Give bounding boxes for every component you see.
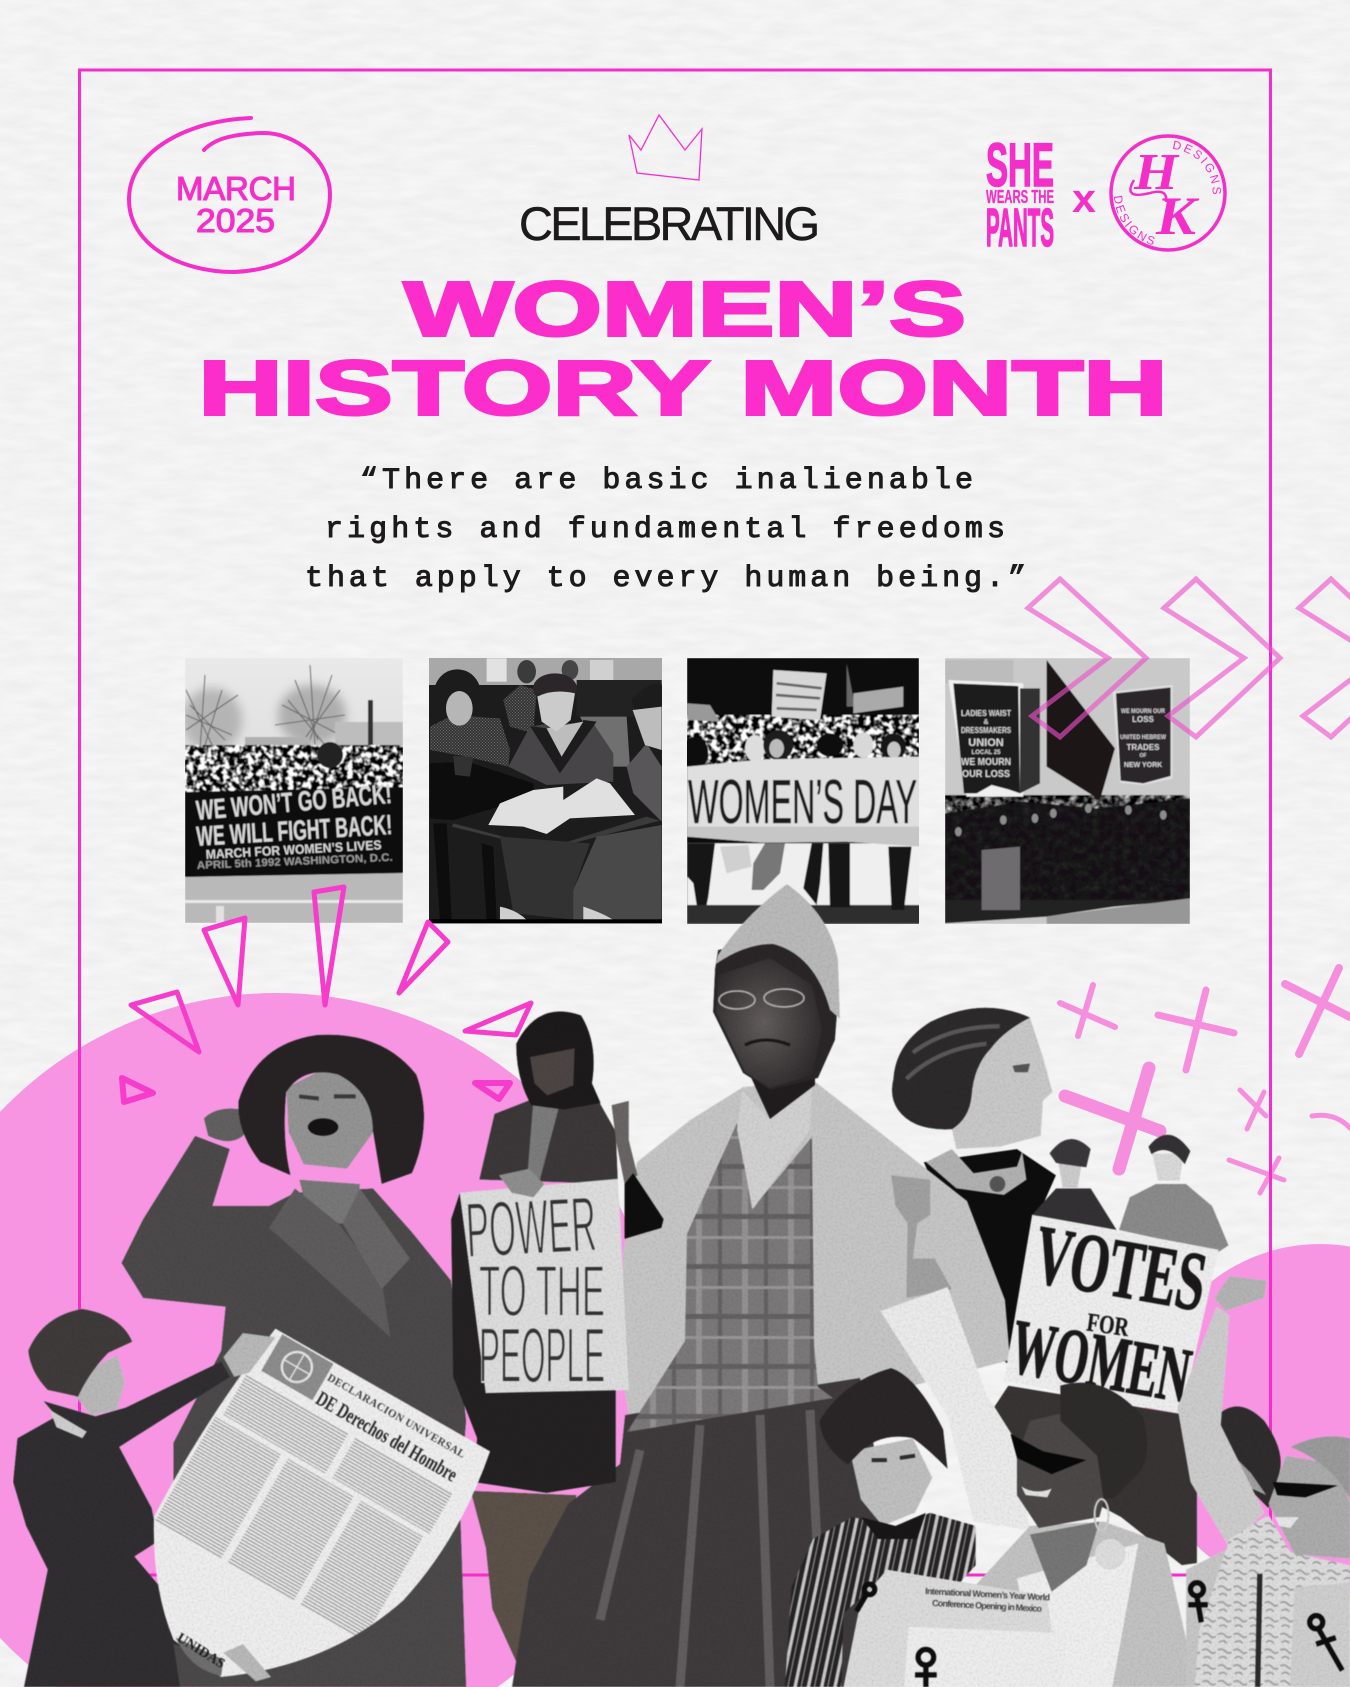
photo: union banners: WE MOURN OUR bbox=[1121, 709, 1166, 715]
date badge: March 2025: MARCH bbox=[176, 170, 296, 207]
photo: union banners: LADIES WAIST bbox=[961, 709, 1011, 718]
figure: activist with sunglasses bbox=[880, 1175, 1196, 1687]
figure: Susan B. Anthony bbox=[892, 1008, 1056, 1372]
photo: union banners: LOCAL 25 bbox=[972, 750, 1001, 756]
figure: Clara Zetkin bbox=[785, 1368, 976, 1687]
title: WOMEN’S bbox=[404, 266, 966, 352]
logo separator: x: x bbox=[1072, 177, 1096, 221]
photo: union banners: UNION bbox=[968, 737, 1004, 749]
photo: march banner: WE WON’T GO BACK! bbox=[195, 778, 393, 826]
photo: march banner: APRIL 5th 1992 WASHINGTON, D.C. bbox=[197, 852, 393, 872]
document: Universal Declaration of Human Rights: DE Derechos del Hombre bbox=[312, 1386, 462, 1486]
photo: union banners: TRADES bbox=[1127, 743, 1160, 752]
page frame bbox=[80, 70, 1270, 1575]
figure: woman with dark hair at back bbox=[1216, 1406, 1281, 1508]
photo: union banners: OF bbox=[1140, 753, 1146, 759]
photo: women at desk bbox=[428, 657, 663, 923]
pink circle: left bbox=[0, 993, 659, 1687]
sign: Votes for Women bbox=[1004, 1208, 1219, 1419]
photo: women's day banner bbox=[682, 658, 921, 924]
figure: woman in hat with raised fist bbox=[121, 1035, 466, 1687]
date badge: March 2025: 2025 bbox=[196, 202, 275, 239]
figure: Marsha's boots bbox=[471, 1491, 577, 1662]
figure: Sojourner Truth bbox=[512, 884, 1010, 1687]
quote: that apply to every human being.” bbox=[305, 562, 1026, 596]
logo: She Wears The Pants: SHE bbox=[986, 131, 1054, 199]
figure: Marsha P. Johnson with sign bbox=[451, 1011, 664, 1493]
logo: HK Designs: K bbox=[1155, 186, 1200, 246]
crosses: scribbled pink marks bbox=[1060, 968, 1350, 1193]
figure: Marsha P. Johnson with sign: PEOPLE bbox=[479, 1311, 605, 1399]
photo: union banners: DRESSMAKERS bbox=[961, 726, 1012, 735]
rays around the left circle bbox=[122, 887, 531, 1102]
chevron arrows bbox=[1028, 579, 1350, 737]
sign: Votes for Women: FOR bbox=[1085, 1307, 1131, 1342]
photo: union banners: UNITED HEBREW bbox=[1120, 735, 1166, 741]
figure: Eleanor Roosevelt bbox=[13, 1309, 232, 1687]
sign: Votes for Women: VOTES bbox=[1027, 1208, 1213, 1330]
logo: HK Designs: H bbox=[1133, 144, 1180, 201]
quote: rights and fundamental freedoms bbox=[325, 513, 1005, 547]
pink circle: right bbox=[1144, 1244, 1350, 1596]
photo: union banners: WE MOURN bbox=[961, 757, 1011, 768]
document: conference papers: Conference Opening in Mexico bbox=[932, 1598, 1043, 1614]
sign: Votes for Women: WOMEN bbox=[1005, 1302, 1197, 1419]
logo: She Wears The Pants: WEARS THE bbox=[986, 187, 1054, 207]
collage of historic figures bbox=[13, 884, 1350, 1687]
logo: HK Designs: DESIGNS bbox=[1173, 140, 1221, 194]
photo: march banner: MARCH FOR WOMEN’S LIVES bbox=[205, 837, 382, 862]
figure: Marsha P. Johnson with sign: TO THE bbox=[479, 1252, 605, 1332]
photo: march banner: WE WILL FIGHT BACK! bbox=[195, 809, 393, 852]
icons: ankh symbols bbox=[856, 1583, 1342, 1687]
date badge: March 2025 bbox=[129, 118, 330, 272]
photo: union banners: OUR LOSS bbox=[962, 769, 1010, 780]
text: PANTS bbox=[986, 198, 1054, 258]
figure: Marsha P. Johnson with sign: POWER bbox=[464, 1180, 598, 1274]
figure: background dark clothing bbox=[974, 1386, 1197, 1565]
document: Universal Declaration of Human Rights: UNIDAS bbox=[174, 1631, 228, 1672]
figure: suffragette right bbox=[1119, 1135, 1229, 1252]
quote: “There are basic inalienable bbox=[360, 464, 973, 498]
logo: HK Designs: DESIGNS bbox=[1114, 196, 1155, 245]
photo: union banners: NEW YORK bbox=[1124, 762, 1162, 769]
logo: She Wears The Pants bbox=[986, 131, 1054, 258]
logo: HK Designs bbox=[1109, 134, 1227, 252]
quote bbox=[305, 464, 1026, 596]
icon: crown bbox=[629, 115, 702, 180]
photo: union banners bbox=[945, 658, 1190, 924]
document: conference papers bbox=[843, 1570, 1067, 1687]
figure: woman with raised arm bbox=[1177, 1276, 1350, 1687]
title bbox=[198, 266, 1168, 432]
photo: women's day banner: WOMEN’S DAY bbox=[688, 768, 917, 837]
heading: celebrating: CELEBRATING bbox=[519, 197, 820, 250]
photo: union banners: LOSS bbox=[1132, 715, 1155, 724]
document: Universal Declaration of Human Rights bbox=[154, 1326, 490, 1681]
title: HISTORY MONTH bbox=[198, 346, 1168, 432]
figure: suffragette left bbox=[1032, 1139, 1117, 1230]
document: Universal Declaration of Human Rights: DECLARACION UNIVERSAL bbox=[325, 1372, 467, 1461]
photo: march banner bbox=[182, 658, 403, 923]
photo: union banners: & bbox=[983, 719, 989, 726]
document: conference papers: International Women’s Year World bbox=[925, 1586, 1050, 1603]
